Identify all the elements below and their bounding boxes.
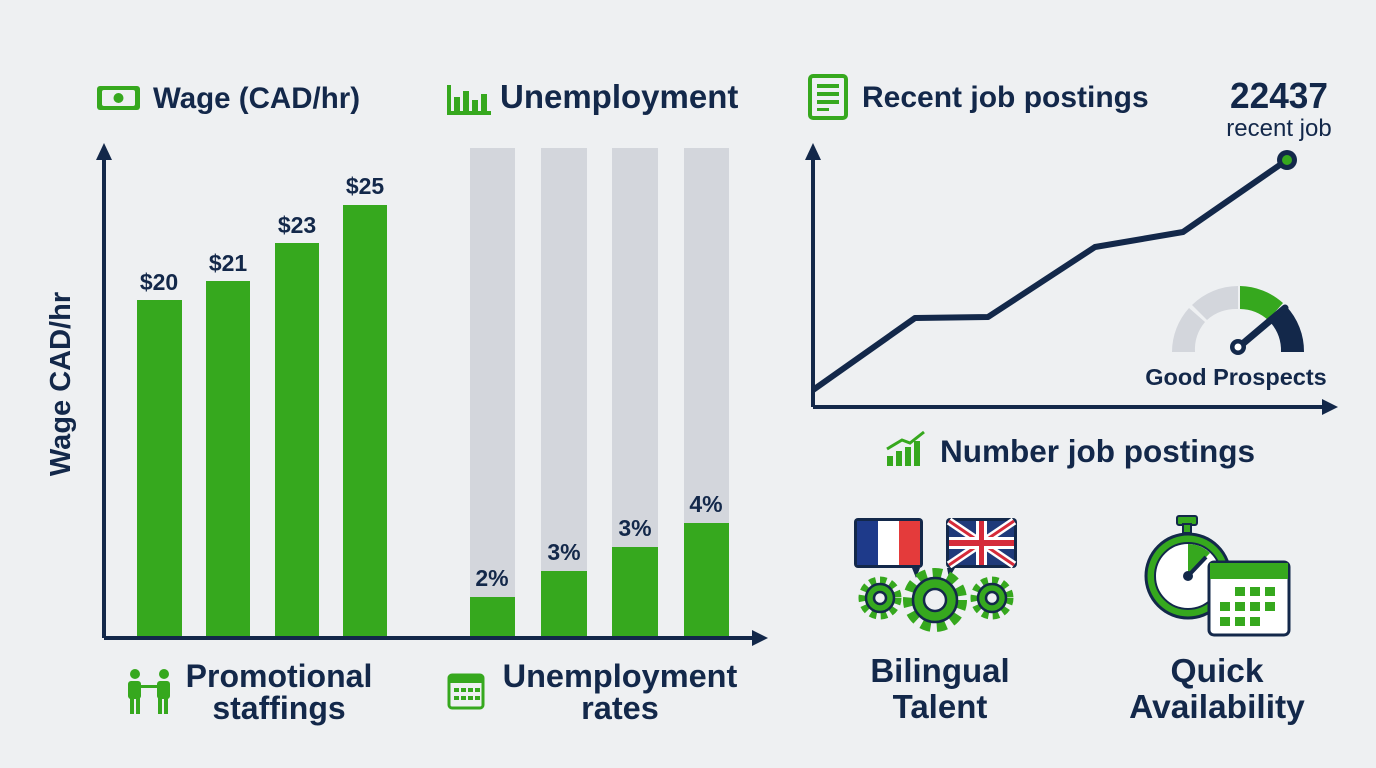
- chart: wage bars: $25: [346, 173, 384, 199]
- chart: job postings line: [805, 143, 1338, 415]
- icon: gauge: [1172, 286, 1304, 355]
- label: bilingual talent: Talent: [893, 688, 987, 725]
- chart: wage bars: $21: [209, 250, 247, 276]
- heading: unemployment: Unemployment: [500, 78, 738, 115]
- icon: money: [97, 86, 140, 110]
- label: quick availability: Availability: [1129, 689, 1305, 726]
- label: quick availability: [1129, 653, 1305, 726]
- icon: bilingual flags and gears: [854, 518, 1017, 626]
- heading: recent job postings: [810, 76, 1149, 118]
- label: unemployment rates: Unemployment: [503, 658, 738, 694]
- chart: wage bars: [137, 173, 387, 638]
- icon: people: [128, 669, 170, 714]
- icon: document: [810, 76, 846, 118]
- label: bilingual talent: [870, 652, 1010, 725]
- icon: stopwatch and calendar: [1146, 516, 1289, 635]
- label: promotional staffings: Promotional: [186, 658, 372, 694]
- label: unemployment rates: [449, 658, 738, 726]
- label: promotional staffings: [128, 658, 372, 726]
- chart: wage bars: $20: [140, 269, 178, 295]
- chart: wage bars: $23: [278, 212, 316, 238]
- chart: unemployment bars: 3%: [618, 515, 652, 541]
- y-axis label: Wage CAD/hr: [45, 292, 77, 476]
- callout: 22437 recent job: recent job: [1226, 115, 1332, 142]
- heading: recent job postings: Recent job postings: [862, 81, 1149, 114]
- heading: wage: Wage (CAD/hr): [153, 82, 360, 115]
- icon: bar chart: [447, 85, 491, 115]
- axes: left chart: [96, 143, 768, 646]
- callout: 22437 recent job: 22437: [1230, 75, 1328, 116]
- label: good prospects: Good Prospects: [1145, 364, 1327, 390]
- chart: unemployment bars: [470, 148, 729, 638]
- chart: unemployment bars: 4%: [689, 491, 723, 517]
- icon: calendar: [449, 675, 483, 708]
- label: unemployment rates: rates: [581, 690, 659, 726]
- icon: growth bars: [887, 432, 924, 466]
- chart: unemployment bars: 3%: [547, 539, 581, 565]
- label: promotional staffings: staffings: [212, 690, 346, 726]
- callout: 22437 recent job: [1226, 75, 1332, 142]
- chart: unemployment bars: 2%: [475, 565, 509, 591]
- label: number job postings: Number job postings: [940, 433, 1255, 469]
- label: quick availability: Quick: [1170, 653, 1264, 690]
- label: bilingual talent: Bilingual: [870, 652, 1010, 689]
